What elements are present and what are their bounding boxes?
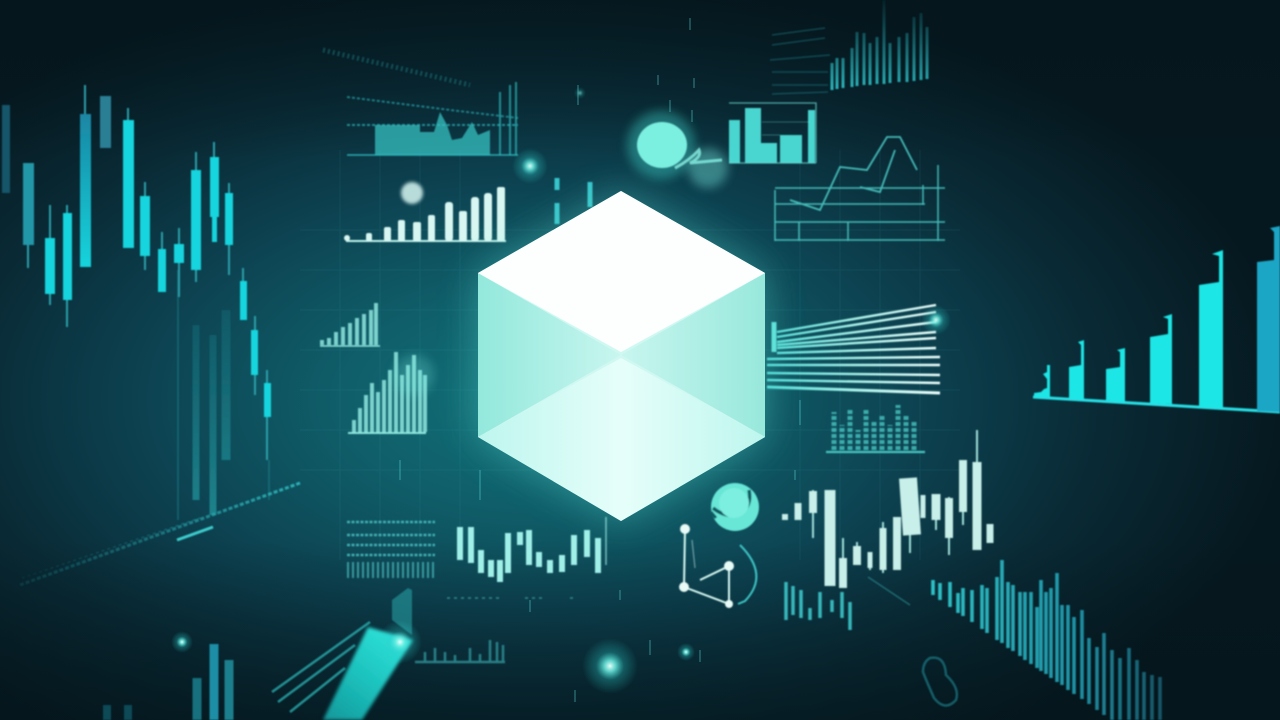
candlestick chart: left	[2, 85, 271, 520]
glow: below sphere	[688, 148, 728, 188]
descending bars: lower right	[933, 560, 1160, 720]
cube glow	[478, 191, 765, 521]
chart: top right	[770, 0, 927, 94]
bar chart: far right	[1033, 226, 1280, 412]
sphere: top	[627, 111, 722, 179]
left face	[478, 273, 621, 437]
right face	[621, 273, 765, 437]
ring outline: bottom right	[923, 658, 957, 706]
dim tall bars	[196, 310, 226, 515]
faint dashes below strip	[447, 597, 575, 599]
triangular bar chart: left	[320, 303, 380, 346]
bodies	[2, 96, 271, 417]
wicks	[28, 85, 267, 460]
glow: bottom center	[582, 638, 638, 694]
small dense chart: right center	[826, 405, 925, 452]
glow: lower left	[171, 631, 193, 653]
thin vertical guide	[178, 270, 269, 520]
cube	[478, 191, 765, 521]
glow: streak	[378, 620, 422, 664]
sphere trail	[675, 150, 722, 168]
dense grid chart: bottom left	[347, 522, 435, 570]
top face	[478, 191, 765, 352]
bar chart: top center right	[729, 103, 816, 163]
small bars behind cube	[557, 178, 590, 224]
faint chart: bottom center	[415, 640, 505, 662]
network diagram: bottom	[679, 524, 756, 608]
line chart: right upper	[775, 137, 945, 241]
glow: small bottom	[677, 643, 695, 661]
small bars: below candles	[786, 582, 850, 630]
bar chart: lower left	[107, 644, 229, 720]
rising bars: white	[344, 182, 506, 241]
white candlesticks: lower right	[785, 430, 990, 588]
faint connector	[868, 577, 910, 605]
bottom face	[478, 358, 765, 521]
diagonal streak: lower left	[20, 483, 300, 585]
glow: fan tip	[921, 305, 951, 335]
small glow: top	[574, 87, 586, 99]
line chart: top center	[323, 50, 518, 155]
cube base	[478, 191, 765, 521]
small glow: near bars	[512, 148, 548, 184]
fuzzy blob	[401, 182, 423, 204]
spike chart: left	[348, 352, 426, 433]
faint grid and dust	[300, 150, 960, 560]
candlestick strip: bottom center	[460, 517, 606, 582]
ring icon	[711, 483, 759, 531]
small glow: spike chart	[394, 355, 434, 395]
dust dashes	[400, 18, 800, 702]
light streak: bottom	[272, 588, 413, 720]
fan lines: right of cube	[767, 305, 940, 393]
